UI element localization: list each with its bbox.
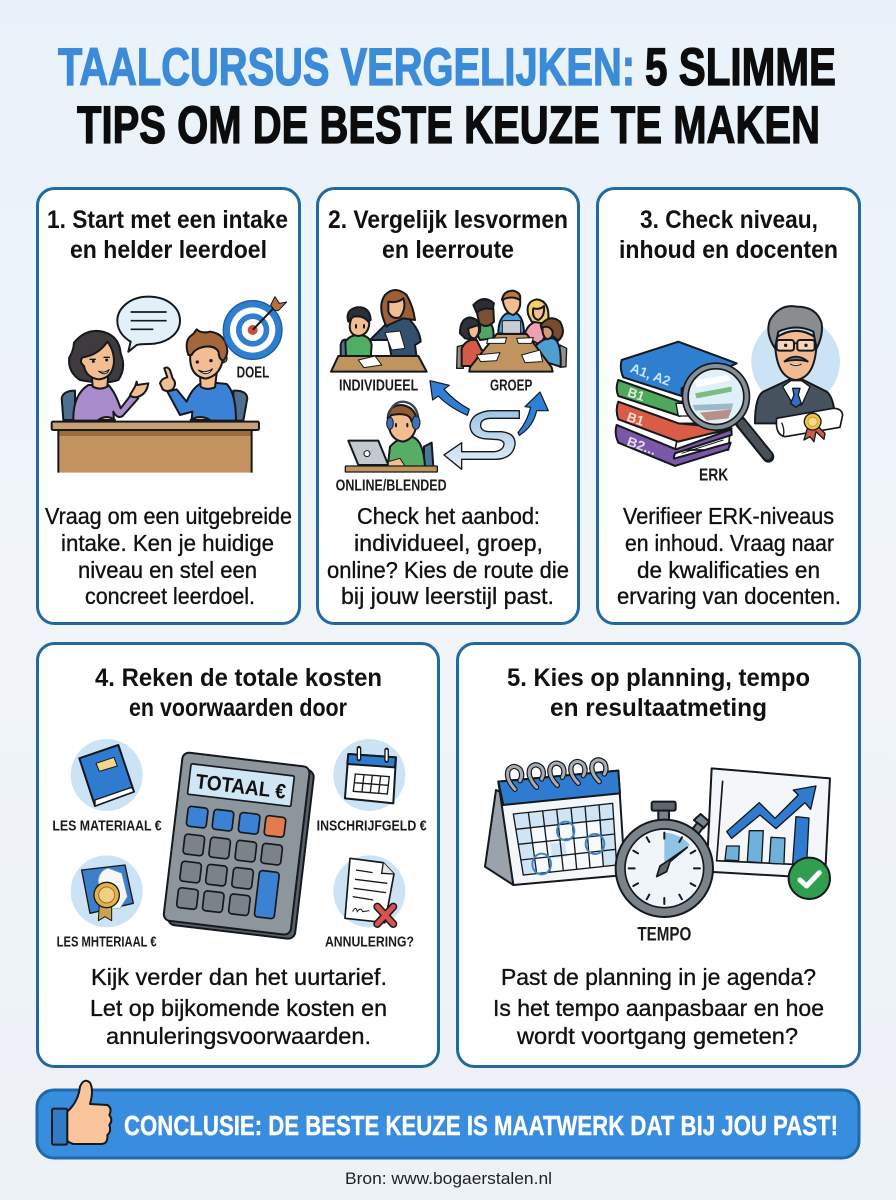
text: tip 1: intake. Ken je huidige [61,530,274,556]
icon: kalender [485,760,625,885]
boeken: B1 [626,385,647,404]
text: tip 2: individueel, groep, [354,530,543,556]
title: TAALCURSUS VERGELIJKEN: [58,38,635,97]
source: Bron: www.bogaerstalen.nl [345,1169,552,1188]
text: tip 3: Verifieer ERK-niveaus [623,503,834,529]
illustration: individueel, groep, online [331,290,567,495]
text: tip 4: annuleringsvoorwaarden. [106,1023,371,1049]
title [58,38,836,155]
heading: tip 3 [619,206,838,264]
text: tip 1: Vraag om een uitgebreide [45,503,292,529]
icon: thumbs up [52,1081,111,1145]
route arrows [430,381,548,469]
heading: tip 3: 3. Check niveau, [640,206,818,234]
illustration: rekenmachine en kostenposten: ANNULERING? [325,935,414,951]
illustration: individueel, groep, online: INDIVIDUEEL [339,378,418,395]
text: tip 3: de kwalificaties en [637,557,820,583]
illustration: boeken, vergrootglas, docent [616,306,843,485]
illustration: kalender, stopwatch, grafiek: TEMPO [637,925,691,946]
illustration: rekenmachine en kostenposten: LES MATERIAAL € [52,819,162,835]
text: tip 3: ervaring van docenten. [617,583,841,609]
title: 5 SLIMME [645,38,836,97]
illustration: gesprek aan tafel met doel [52,297,287,473]
docent [751,306,840,423]
heading: tip 5: en resultaatmeting [550,694,767,722]
heading: tip 5 [507,664,810,722]
panel 1: intake en leerdoel [38,188,300,624]
boeken: B2... [625,434,658,458]
woman [73,385,138,421]
heading: tip 3: inhoud en docenten [619,236,838,264]
text: tip 4 [90,964,387,1049]
text: tip 5 [493,964,824,1049]
text: tip 5: Past de planning in je agenda? [501,964,816,990]
heading: tip 2: 2. Vergelijk lesvormen [328,206,568,234]
icon: inschrijfgeld kalender [333,739,405,811]
table [58,430,252,473]
icon: grafiek [707,768,830,878]
icon: rekenmachine totaal: TOTAAL € [194,770,288,804]
text: tip 2: online? Kies de route die [327,557,569,583]
icon: stopwatch [616,802,713,917]
online [345,402,437,472]
illustration: rekenmachine en kostenposten [52,739,427,951]
text: tip 1: niveau en stel een [78,557,257,583]
text: tip 1: concreet leerdoel. [85,583,255,609]
boeken: A1, A2 [628,360,673,389]
text: tip 3 [617,503,841,609]
heading: tip 2 [328,206,568,264]
icon: certificaat met zegel [71,855,143,927]
illustration: kalender, stopwatch, grafiek [485,760,830,946]
boeken: B1 [625,409,646,429]
illustration: individueel, groep, online: GROEP [490,378,532,395]
illustration: individueel, groep, online: ONLINE/BLENDED [336,478,447,495]
panel 3: niveau, inhoud, docenten [598,188,860,624]
icon: rekenmachine totaal [163,752,315,939]
text: tip 4: Let op bijkomende kosten en [90,995,387,1021]
text: tip 1 [45,503,292,609]
text: tip 3: en inhoud. Vraag naar [625,530,834,556]
speech bubble [117,297,180,352]
panel 5: planning, tempo, resultaat [458,644,860,1066]
target icon [223,297,287,359]
heading: tip 4: en voorwaarden door [129,694,347,722]
icon: annulering document [333,855,405,927]
heading: tip 1: en helder leerdoel [70,236,267,264]
conclusion banner [37,1081,859,1158]
panel 4: kosten en voorwaarden [38,644,438,1066]
panel 2: lesvormen en leerroute [318,188,578,624]
chairs [62,391,247,421]
man [167,382,236,421]
heading: tip 1: 1. Start met een intake [47,206,288,234]
text: tip 2: bij jouw leerstijl past. [341,583,554,609]
diploma [776,408,843,442]
illustration: rekenmachine en kostenposten: INSCHRIJFGELD € [317,819,427,835]
illustration: rekenmachine en kostenposten: LES MHTERIAAL € [57,935,157,951]
text: tip 2: Check het aanbod: [357,503,540,529]
text: tip 4: Kijk verder dan het uurtarief. [91,964,387,990]
text: tip 2 [327,503,569,609]
vergrootglas [685,366,768,457]
illustration: gesprek aan tafel met doel: DOEL [237,364,269,381]
heading: tip 4: 4. Reken de totale kosten [95,664,382,692]
icon: lesmateriaal boek [71,739,143,811]
heading: tip 5: 5. Kies op planning, tempo [507,664,810,692]
individueel [331,290,427,372]
illustration: boeken, vergrootglas, docent: ERK [699,465,729,485]
text: tip 5: Is het tempo aanpasbaar en hoe [493,995,824,1021]
groep [457,291,567,372]
text: tip 5: wordt voortgang gemeten? [516,1023,798,1049]
icon: check [789,858,830,899]
heading: tip 2: en leerroute [382,236,514,264]
heading: tip 4 [95,664,382,722]
boeken [616,342,737,466]
heading: tip 1 [47,206,288,264]
